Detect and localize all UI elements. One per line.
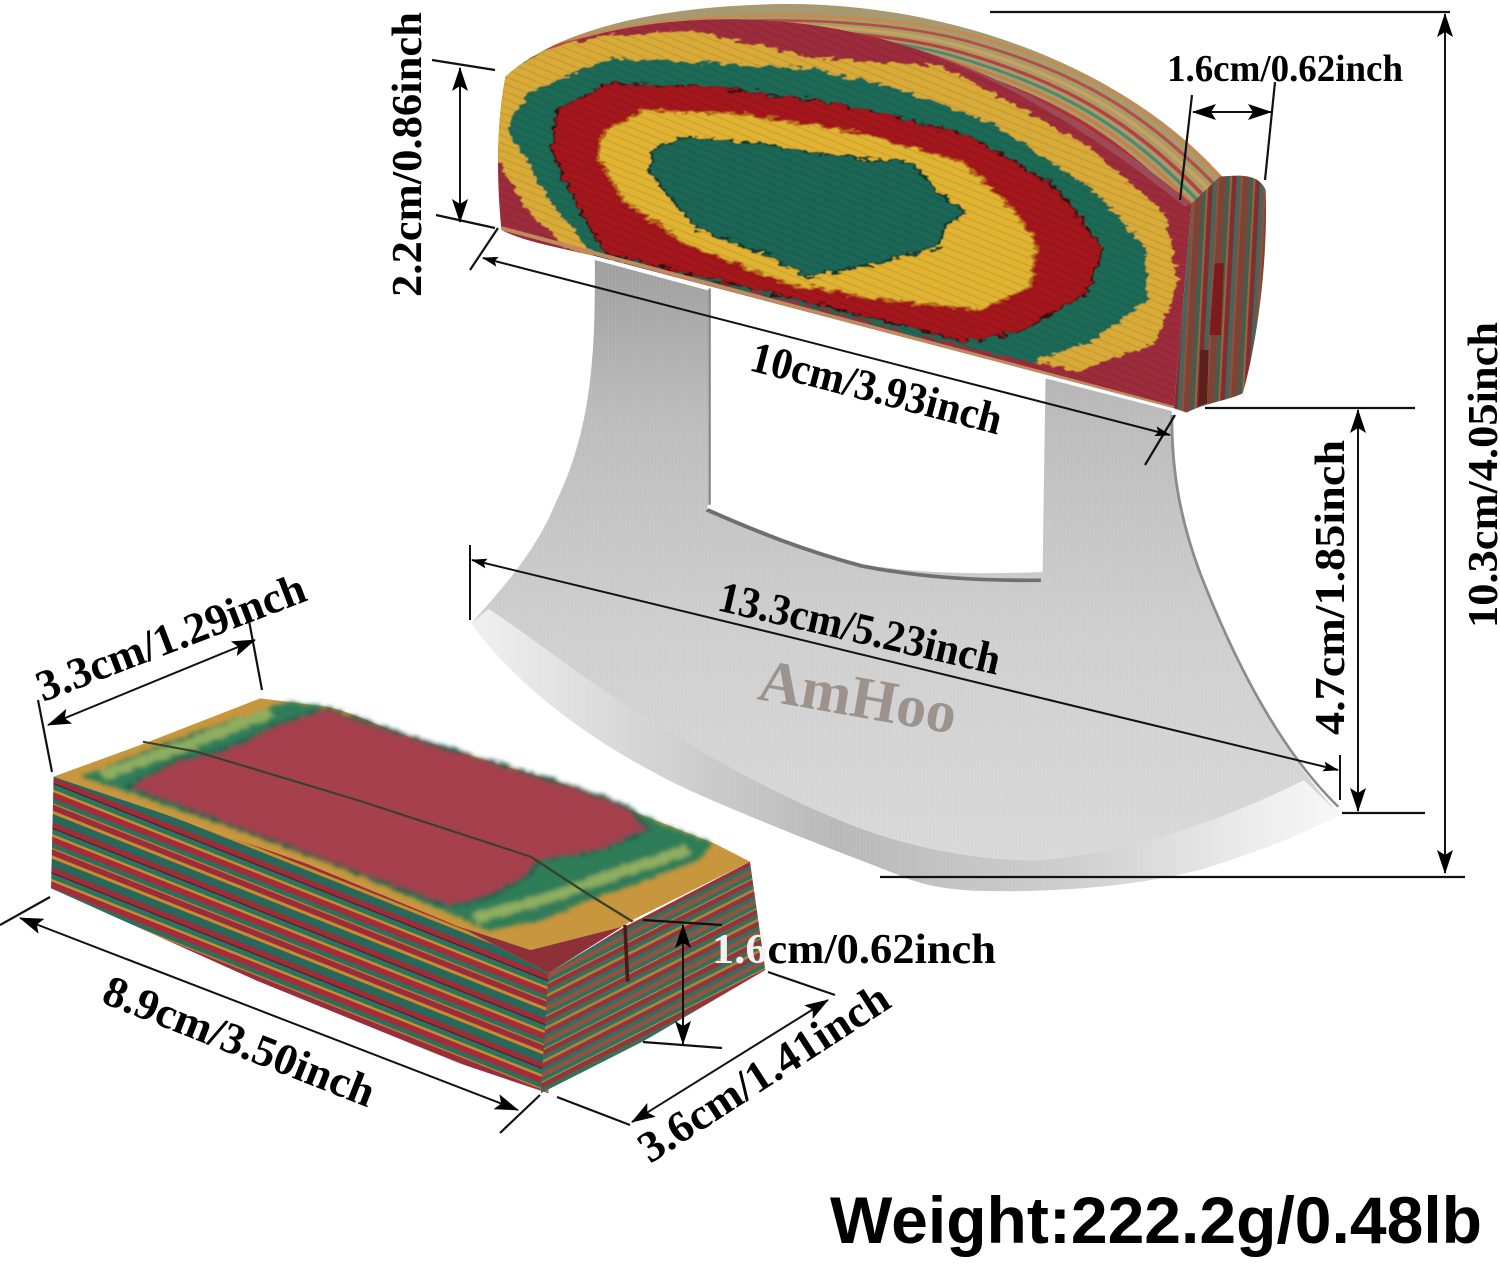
stand (51, 698, 765, 1093)
dimension: blade width 13.3cm (470, 545, 1340, 800)
handle lower edge (497, 227, 1174, 408)
weight label: Weight:222.2g/0.48lb (830, 1183, 1482, 1257)
dimension: handle thickness 1.6cm (1167, 48, 1403, 200)
blade body (471, 260, 1340, 891)
blade bevel edge (471, 609, 1340, 891)
end face notch (1198, 350, 1209, 406)
center green (648, 137, 965, 277)
blade window (707, 289, 1045, 573)
stand front bevel (459, 927, 622, 973)
brand mark on blade: AmHoo (754, 647, 962, 747)
stand front laminated face (51, 777, 548, 1093)
stand top face (54, 698, 750, 950)
blade brushed texture (471, 260, 1340, 891)
dimension: stand length 8.9cm: 8.9cm/3.50inch (96, 966, 382, 1117)
blade right edge highlight (1172, 415, 1338, 807)
handle base colour (498, 19, 1192, 408)
stand end face (541, 862, 765, 1093)
dimension: handle thickness 1.6cm: 1.6cm/0.62inch (1167, 48, 1403, 90)
dimension: stand depth 3.6cm: 3.6cm/1.41inch (629, 973, 899, 1172)
dimension: stand width 3.3cm: 3.3cm/1.29inch (29, 563, 313, 711)
window lower lip (707, 510, 1041, 580)
dimension: stand length 8.9cm (0, 897, 540, 1133)
end face slot (1210, 263, 1224, 335)
stand top colour bands (82, 702, 712, 930)
dimension: slot depth 1.6cm: 1.6cm/0.62inch (712, 927, 996, 973)
red ring (551, 83, 1103, 342)
dimension: handle height 2.2cm (385, 12, 495, 297)
dimension: handle length 10cm: 10cm/3.93inch (745, 332, 1008, 444)
dimension: blade width 13.3cm: 13.3cm/5.23inch (714, 572, 1005, 685)
handle wood grain (498, 19, 1191, 404)
handle top bevel (917, 49, 1192, 207)
handle end face (1174, 176, 1266, 413)
dimension: blade height 4.7cm: 4.7cm/1.85inch (1308, 440, 1354, 735)
window left edge (708, 289, 712, 505)
dimension: handle length 10cm (470, 228, 1175, 465)
knife blade (471, 260, 1340, 891)
dimension: handle height 2.2cm: 2.2cm/0.86inch (385, 12, 431, 297)
handle front face with wood rings (498, 19, 1192, 408)
outer yellow ring (490, 32, 1176, 370)
inner yellow ring (597, 110, 1036, 310)
stand slot (143, 742, 633, 982)
dimension: stand width 3.3cm (29, 563, 313, 772)
handle striped top edge (513, 4, 1222, 204)
dimension: slot depth 1.6cm (643, 920, 996, 1048)
green ring (511, 60, 1146, 361)
